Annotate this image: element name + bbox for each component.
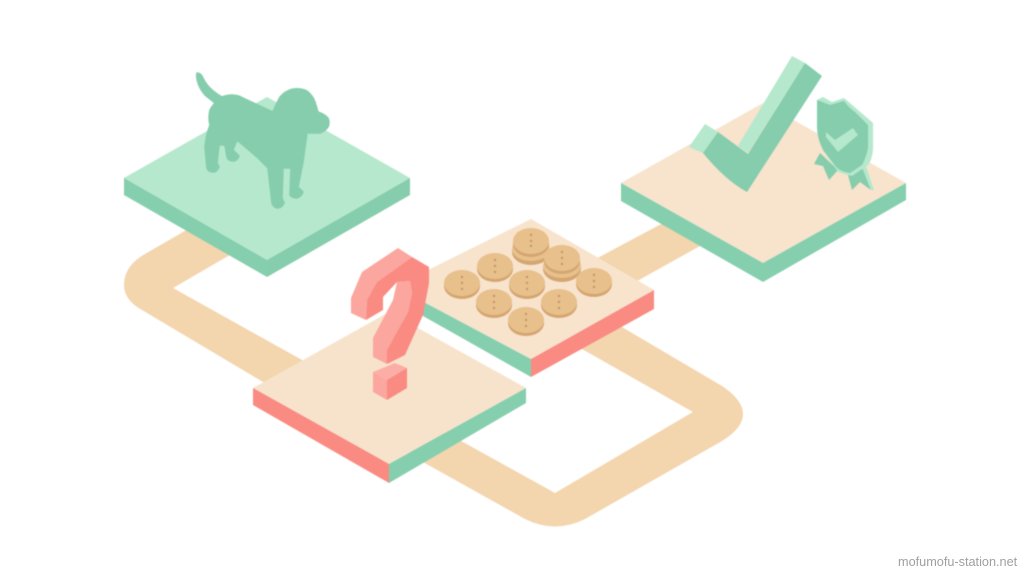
icon: shield badge with ribbons bbox=[814, 97, 874, 190]
platform: cookies bbox=[420, 219, 654, 377]
watermark text: mofumofu-station.net bbox=[898, 555, 1017, 569]
platform: dog start bbox=[124, 97, 410, 277]
icon: large check mark bbox=[689, 56, 822, 192]
platform: question bbox=[253, 312, 526, 483]
tan connecting path bbox=[124, 222, 743, 526]
icon: 3D question mark bbox=[351, 248, 429, 400]
platform: check goal bbox=[621, 103, 906, 282]
icon: dog silhouette bbox=[197, 73, 329, 208]
cookies group bbox=[444, 228, 612, 336]
